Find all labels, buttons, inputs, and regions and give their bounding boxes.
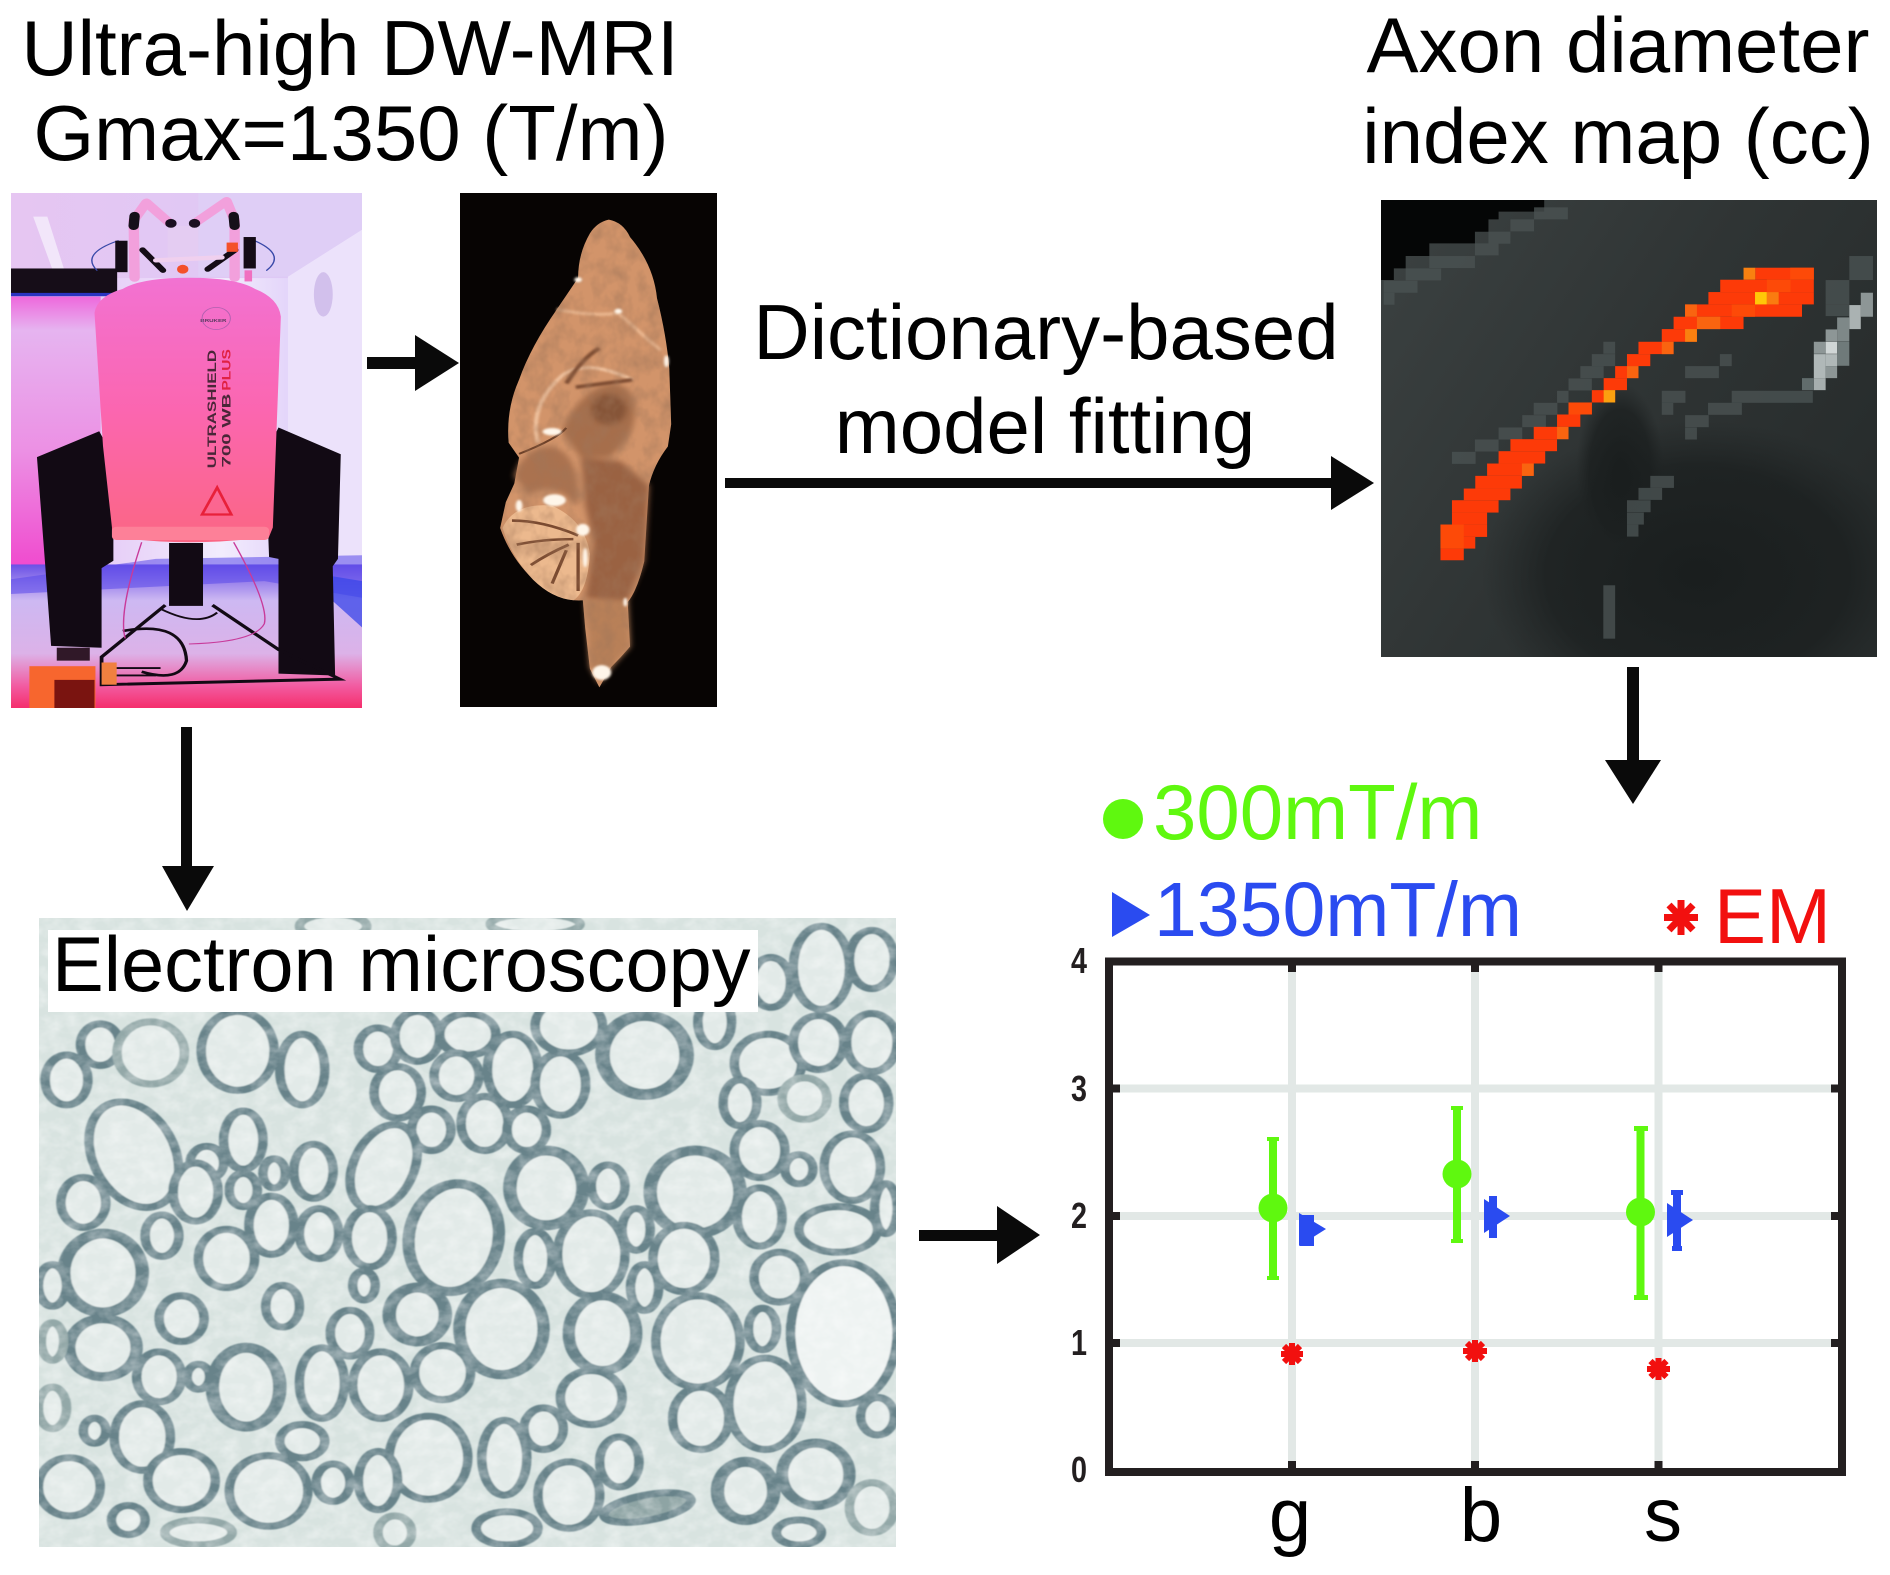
y axis labels: 4 (1071, 940, 1087, 981)
brain silhouette (500, 220, 671, 687)
arrow: brain scan to axon map (725, 456, 1374, 510)
orange box (29, 648, 117, 708)
title: axon diameter index map (1362, 1, 1874, 180)
dark corner (1381, 200, 1544, 280)
scanner magnet body (95, 278, 281, 542)
title: ultra-high DW-MRI: Gmax=1350 (T/m) (33, 89, 669, 177)
scanner support legs (37, 428, 341, 675)
scanner top fittings (92, 201, 274, 281)
title: ultra-high DW-MRI: Ultra-high DW-MRI (21, 4, 679, 92)
chart frame and ticks (1109, 962, 1842, 1472)
image: electron microscopy (39, 912, 1692, 1547)
legend: 300mT/m: 300mT/m (1153, 768, 1482, 856)
title: axon diameter index map: Axon diameter (1367, 1, 1869, 89)
x axis labels: s (1644, 1473, 1682, 1558)
scanner magnet body: BRUKER (200, 319, 227, 324)
series: 300mT/m (1258, 1106, 1655, 1300)
scanner magnet body: 700 WB (219, 393, 233, 468)
arrow: electron microscopy to chart (919, 1206, 1040, 1264)
white matter highlight (1802, 293, 1873, 390)
label: dictionary-based model fitting: Dictionary-based (753, 288, 1339, 376)
legend (1103, 768, 1831, 960)
chart grid (1113, 965, 1838, 1468)
arrow: axon map to chart (1605, 667, 1661, 804)
y axis labels: 0 (1071, 1449, 1087, 1490)
y axis labels: 2 (1071, 1195, 1087, 1236)
corpus callosum heat overlay (1440, 268, 1814, 560)
label: dictionary-based model fitting (753, 288, 1339, 470)
legend: 1350mT/m: 1350mT/m (1154, 867, 1522, 953)
title: ultra-high DW-MRI (21, 4, 679, 177)
arrow: scanner to electron microscopy (162, 727, 214, 911)
image: axon diameter index map (1381, 200, 1877, 657)
series: EM (1281, 1340, 1670, 1380)
legend: EM: EM (1714, 872, 1831, 960)
bright tissue pixels (1384, 207, 1873, 639)
y axis labels: 1 (1071, 1322, 1087, 1363)
y axis labels: 3 (1071, 1068, 1087, 1109)
photo: MRI scanner (11, 193, 362, 708)
x axis labels: b (1460, 1473, 1502, 1558)
label: electron microscopy: Electron microscopy (52, 922, 751, 1008)
arrow: scanner to brain scan (367, 335, 459, 391)
scanner magnet body: ULTRASHIELD (205, 349, 219, 468)
scanner magnet body: PLUS (219, 349, 233, 391)
y axis labels (1071, 940, 1087, 1490)
label: dictionary-based model fitting: model fitting (835, 382, 1255, 470)
series: 1350mT/m (1299, 1190, 1693, 1251)
x axis labels: g (1269, 1473, 1311, 1558)
chart: axon diameter comparison (1071, 940, 1842, 1558)
dark lower centre tissue (1482, 420, 1890, 727)
myelinated axon rings (38, 914, 897, 1549)
dark midline region (1576, 383, 1664, 557)
title: axon diameter index map: index map (cc) (1362, 92, 1874, 180)
x axis labels (1269, 1473, 1682, 1558)
mottled tissue texture (39, 918, 896, 1547)
image: brain MRI section (460, 193, 717, 707)
